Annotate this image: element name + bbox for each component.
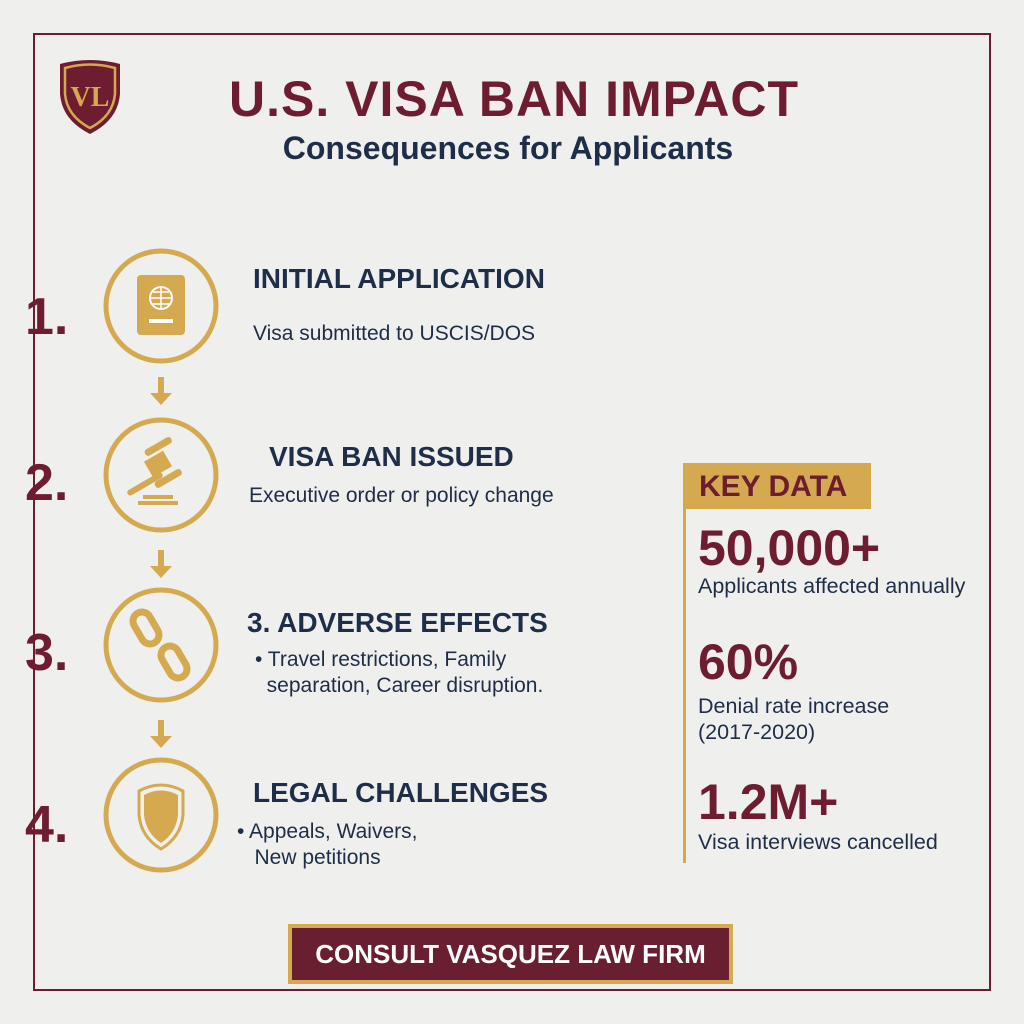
panel: key data: [683, 463, 966, 863]
CTA button: CONSULT VASQUEZ LAW FIRM: [315, 939, 706, 969]
stat 2: (2017-2020): [698, 720, 815, 744]
step 2: Executive order or policy change: [249, 484, 554, 507]
step 2: VISA BAN ISSUED: [269, 441, 514, 472]
step 3: separation, Career disruption.: [267, 674, 543, 697]
CTA button: [288, 924, 733, 984]
icon: passport: [104, 248, 218, 364]
step 2: [25, 418, 554, 532]
logo shield: [60, 60, 120, 134]
stat 1: 50,000+: [698, 520, 880, 576]
step 4: LEGAL CHALLENGES: [253, 777, 548, 808]
title: U.S. VISA BAN IMPACT: [229, 71, 799, 127]
stat 3: 1.2M+: [698, 774, 838, 830]
step 1: Visa submitted to USCIS/DOS: [253, 322, 535, 345]
arrow: [150, 720, 172, 748]
stat 3: [698, 774, 938, 854]
step 2: 2.: [25, 454, 68, 512]
step 1: INITIAL APPLICATION: [253, 263, 545, 294]
stat 2: 60%: [698, 634, 798, 690]
step 3: • Travel restrictions, Family: [255, 648, 506, 671]
icon: gavel: [104, 418, 218, 532]
step 4: • Appeals, Waivers,: [237, 820, 417, 843]
step 3: 3.: [25, 624, 68, 682]
step 3: 3. ADVERSE EFFECTS: [247, 607, 548, 638]
subtitle: Consequences for Applicants: [283, 130, 733, 166]
step 3: [25, 588, 548, 702]
key data heading: KEY DATA: [699, 470, 847, 503]
stat 1: Applicants affected annually: [698, 574, 965, 598]
stat 2: [698, 634, 889, 744]
stat 2: Denial rate increase: [698, 694, 889, 718]
step 1: 1.: [25, 288, 68, 346]
arrow: [150, 550, 172, 578]
step 4: New petitions: [254, 846, 381, 869]
step 1: [25, 248, 545, 364]
stat 3: Visa interviews cancelled: [698, 830, 938, 854]
icon: broken chain: [104, 588, 218, 702]
step 4: 4.: [25, 796, 68, 854]
key data heading: [683, 463, 871, 509]
stat 1: [698, 520, 966, 598]
step 4: [25, 758, 548, 872]
arrow: [150, 377, 172, 405]
logo shield: VL: [71, 82, 109, 113]
icon: shield: [104, 758, 218, 872]
